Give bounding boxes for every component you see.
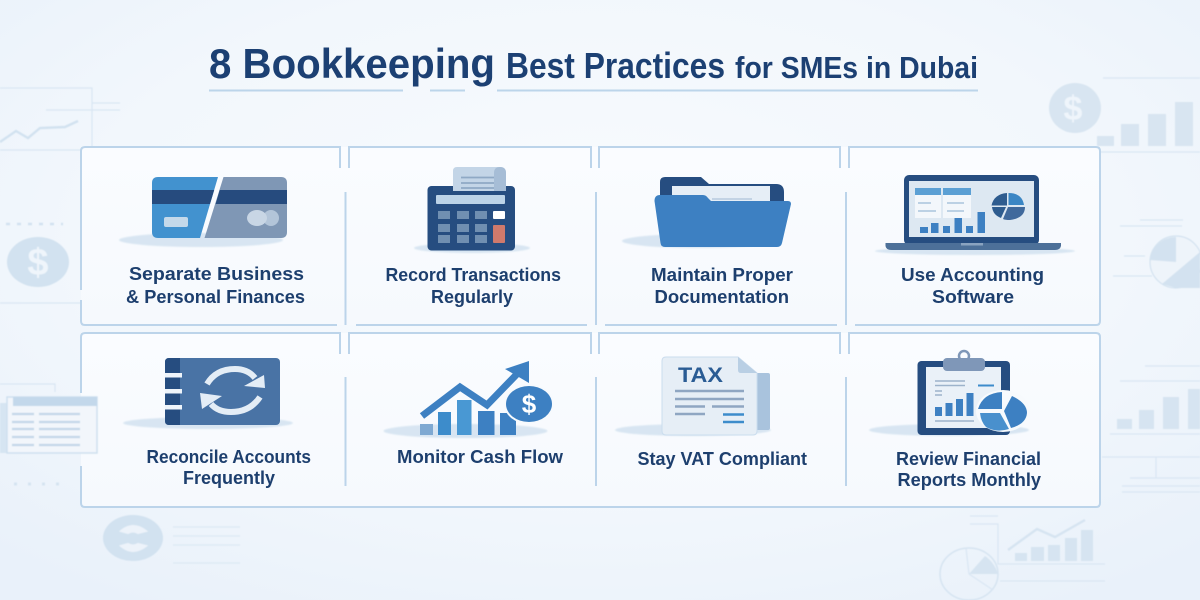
title: 8 Bookkeeping [209, 40, 495, 87]
label [651, 264, 793, 307]
panel: reconcile accounts [123, 358, 311, 488]
icon: folder [622, 177, 791, 248]
panel: record transactions [386, 167, 561, 307]
panel: separate finances [119, 177, 305, 307]
icon: tax document: TAX [678, 364, 723, 387]
label [386, 264, 561, 307]
background decoration: finance motifs: $ [27, 242, 49, 284]
label: Separate Business [129, 263, 304, 284]
label: Stay VAT Compliant [638, 448, 807, 469]
label: Review Financial [896, 448, 1041, 469]
label: Reconcile Accounts [146, 446, 311, 467]
label: Record Transactions [386, 264, 561, 285]
icon: ledger with sync arrows [123, 358, 293, 429]
background decoration: document overlapping frame [0, 397, 97, 453]
label: Maintain Proper [651, 264, 793, 285]
icon: tax document [615, 357, 771, 436]
title: Best Practices [506, 45, 725, 86]
title underline [209, 90, 978, 92]
title [209, 40, 978, 87]
panel: VAT compliance [615, 357, 807, 469]
label: Frequently [183, 467, 276, 488]
label: Software [932, 286, 1014, 307]
icon: split credit card [119, 177, 287, 247]
icon: growth chart with coin [384, 361, 554, 438]
label: Monitor Cash Flow [397, 446, 564, 467]
title: for SMEs in Dubai [735, 50, 978, 85]
label [896, 448, 1042, 490]
label: Reports Monthly [898, 469, 1042, 490]
icon: growth chart with coin: $ [522, 389, 537, 419]
background decoration: finance motifs: $ [1064, 90, 1083, 128]
label [901, 264, 1044, 307]
label: Use Accounting [901, 264, 1044, 285]
icon: calculator with receipt [414, 167, 530, 253]
label [146, 446, 311, 488]
panel: monitor cash flow [384, 361, 564, 467]
label: Documentation [654, 286, 789, 307]
icon: clipboard with report [869, 351, 1030, 436]
icon: laptop with charts [875, 175, 1075, 255]
label [126, 263, 305, 307]
panel: accounting software [875, 175, 1075, 307]
grid frame [81, 147, 1100, 507]
label: & Personal Finances [126, 286, 305, 307]
label: Regularly [431, 286, 514, 307]
panel: review financial reports [869, 351, 1042, 490]
panel: maintain documentation [622, 177, 793, 307]
